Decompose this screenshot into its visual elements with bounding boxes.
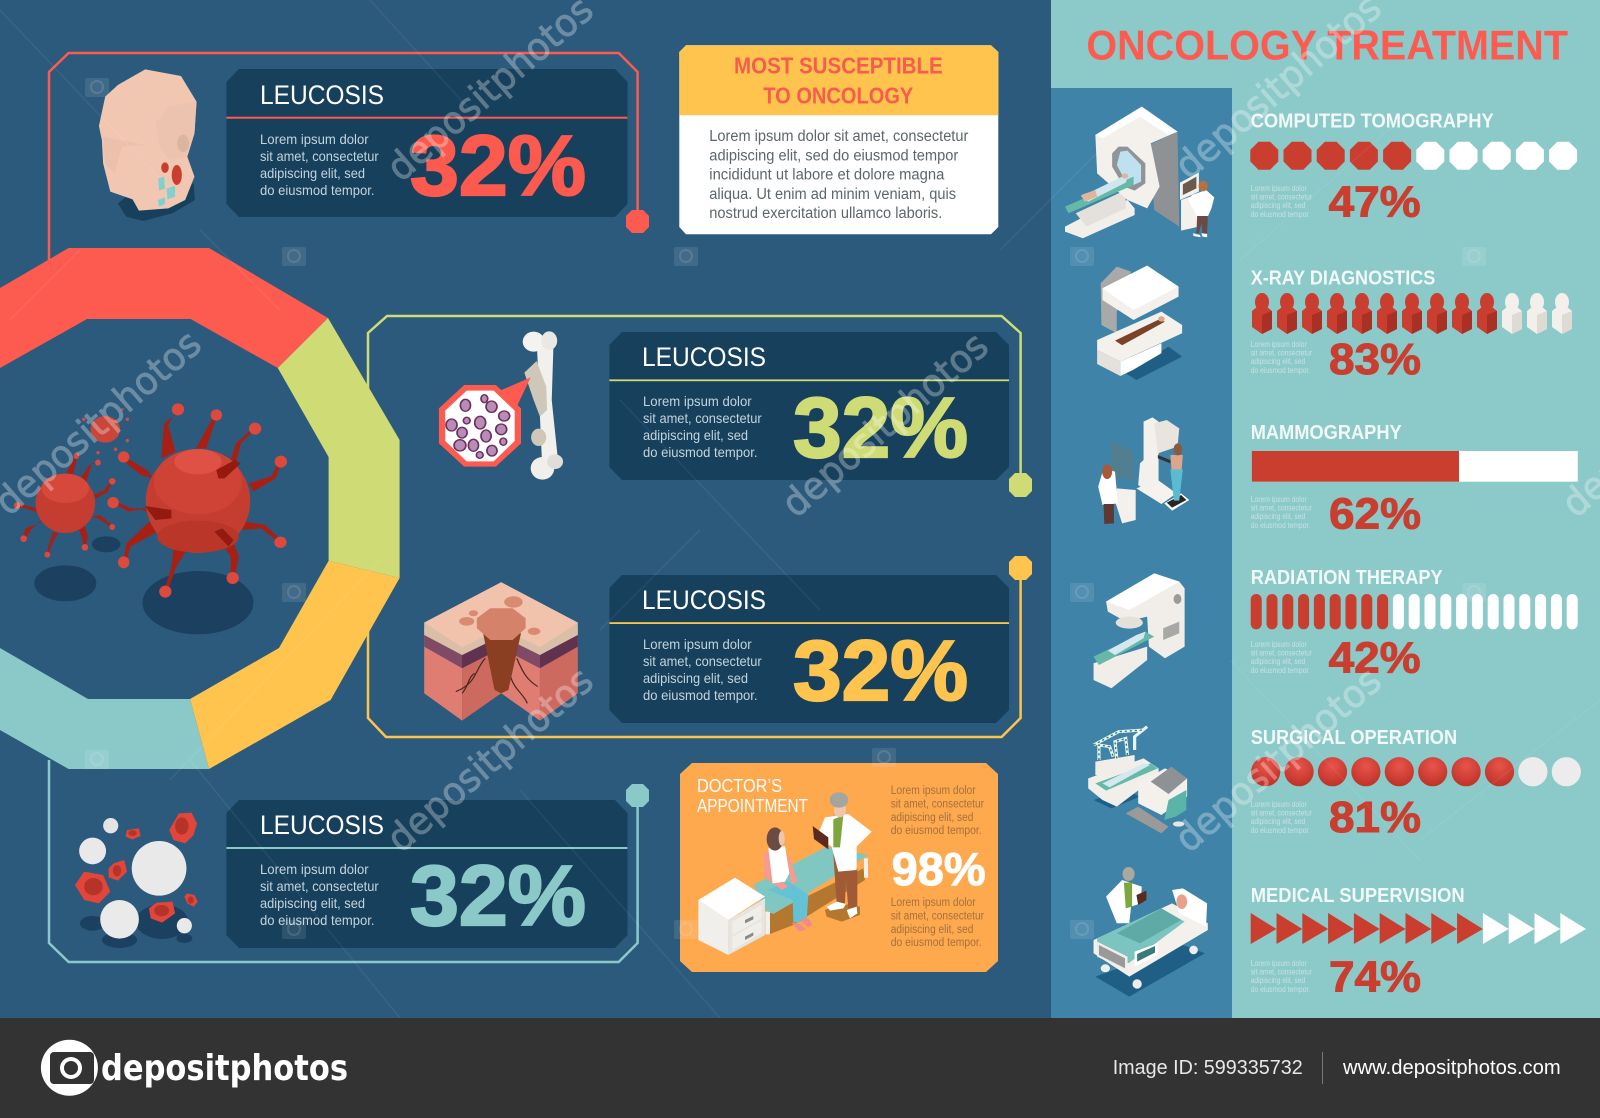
- description: sit amet, consectetur: [643, 410, 762, 426]
- illustration: CT scanner: [1065, 107, 1214, 238]
- percentage: 74%: [1329, 953, 1421, 1002]
- heading: MAMMOGRAPHY: [1251, 422, 1402, 444]
- watermark layer: depositphotos: [773, 323, 997, 526]
- percentage: 47%: [1329, 178, 1421, 227]
- card background: [226, 800, 628, 948]
- description: sit amet, consectetur: [1251, 192, 1312, 202]
- section: X-ray diagnostics: [1251, 267, 1572, 384]
- card heading: DOCTOR’S: [697, 775, 782, 796]
- description: Lorem ipsum dolor: [260, 131, 369, 147]
- card title: TO ONCOLOGY: [763, 82, 913, 108]
- description: Lorem ipsum dolor: [643, 636, 752, 652]
- description: do eiusmod tempor.: [1251, 826, 1310, 835]
- description: do eiusmod tempor.: [260, 912, 374, 928]
- icon: cancer cells: [14, 403, 287, 634]
- description: sit amet, consectetur: [1251, 968, 1312, 976]
- section: mammography: [1251, 422, 1578, 538]
- heading: LEUCOSIS: [642, 585, 766, 615]
- description: adipiscing elit, sed: [260, 165, 365, 181]
- divider: [226, 847, 627, 849]
- pictogram chart: [1252, 293, 1572, 334]
- heading: LEUCOSIS: [642, 342, 766, 372]
- description: do eiusmod tempor.: [1251, 521, 1310, 530]
- description: sit amet, consectetur: [260, 148, 379, 164]
- description: [1251, 184, 1312, 219]
- description bottom: [891, 897, 984, 949]
- description: sit amet, consectetur: [1251, 648, 1312, 658]
- icon: head with lymph nodes: [99, 69, 197, 221]
- description: Lorem ipsum dolor: [1251, 800, 1307, 809]
- illustration column: [1051, 88, 1232, 1018]
- description: Lorem ipsum dolor: [1251, 959, 1307, 968]
- logo wordmark: depositphotos: [101, 1048, 348, 1089]
- card title: [734, 52, 943, 108]
- pictogram chart: [1250, 142, 1577, 170]
- illustration: hospital bed and doctor: [1094, 867, 1208, 997]
- illustration: surgical robot: [1088, 727, 1187, 833]
- percentage: 98%: [892, 843, 986, 895]
- description bottom: do eiusmod tempor.: [891, 937, 982, 949]
- percentage: 62%: [1329, 489, 1421, 538]
- footer logo: [41, 1040, 348, 1096]
- description: [1251, 959, 1312, 994]
- icon: skin cross-section with tumour: [424, 582, 578, 721]
- section: medical supervision: [1251, 885, 1586, 1002]
- heading: LEUCOSIS: [260, 80, 384, 110]
- heading: SURGICAL OPERATION: [1251, 727, 1457, 749]
- description: sit amet, consectetur: [260, 878, 379, 894]
- description: Lorem ipsum dolor: [1251, 495, 1307, 504]
- description top: Lorem ipsum dolor: [891, 785, 976, 797]
- description: [1251, 800, 1312, 835]
- percentage: 81%: [1329, 793, 1421, 842]
- icon: bone with marrow cells: [439, 331, 563, 480]
- description: adipiscing elit, sed: [1251, 357, 1305, 366]
- frame: green: [368, 316, 1032, 497]
- description: adipiscing elit, sed: [1251, 201, 1305, 210]
- card text: aliqua. Ut enim ad minim veniam, quis: [709, 186, 956, 203]
- image ID: Image ID: 599335732: [1113, 1057, 1303, 1079]
- description: adipiscing elit, sed: [643, 670, 748, 686]
- heading: LEUCOSIS: [260, 810, 384, 840]
- card text: incididunt ut labore et dolore magna: [709, 167, 945, 184]
- description top: do eiusmod tempor.: [891, 825, 982, 837]
- description: adipiscing elit, sed: [1251, 657, 1305, 666]
- description: Lorem ipsum dolor: [260, 861, 369, 877]
- divider: [609, 622, 1009, 624]
- description bottom: Lorem ipsum dolor: [891, 897, 976, 909]
- description: Lorem ipsum dolor: [643, 393, 752, 409]
- description: [1251, 340, 1312, 375]
- card background: [609, 332, 1009, 480]
- illustration: radiation therapy machine: [1094, 573, 1185, 688]
- description: [1251, 640, 1312, 675]
- frame: red: [49, 53, 649, 262]
- ring segment: yellow: [190, 561, 400, 769]
- description: do eiusmod tempor.: [1251, 985, 1310, 994]
- description: do eiusmod tempor.: [1251, 366, 1310, 375]
- watermark layer: depositphotos: [378, 658, 602, 861]
- card header: [679, 45, 998, 115]
- description: adipiscing elit, sed: [260, 895, 365, 911]
- description: adipiscing elit, sed: [1251, 512, 1305, 521]
- percentage: 32%: [793, 381, 968, 476]
- card title: MOST SUSCEPTIBLE: [734, 52, 943, 78]
- description: adipiscing elit, sed: [643, 427, 748, 443]
- logo badge: [41, 1040, 98, 1096]
- description bottom: sit amet, consectetur: [891, 910, 984, 922]
- percentage: 32%: [410, 849, 586, 944]
- progress bar: [1252, 451, 1578, 482]
- card: green leucosis: [609, 332, 1009, 480]
- percentage: 42%: [1329, 634, 1421, 683]
- sphere chart: [1251, 757, 1581, 786]
- description: [1251, 495, 1312, 530]
- description: do eiusmod tempor.: [643, 687, 758, 703]
- card text: nostrud exercitation ullamco laboris.: [709, 205, 942, 222]
- card: most susceptible: [679, 45, 998, 234]
- arrow chart: [1251, 913, 1586, 944]
- percentage: 32%: [793, 624, 968, 719]
- percentage: 83%: [1329, 335, 1421, 384]
- description: adipiscing elit, sed: [1251, 976, 1305, 985]
- heading: MEDICAL SUPERVISION: [1251, 885, 1465, 907]
- section: computed tomography: [1250, 111, 1577, 227]
- description: [260, 131, 379, 198]
- description: sit amet, consectetur: [1251, 348, 1312, 358]
- heading: X-RAY DIAGNOSTICS: [1251, 267, 1435, 289]
- description top: sit amet, consectetur: [891, 798, 984, 810]
- card background: [609, 575, 1009, 723]
- card heading: APPOINTMENT: [697, 795, 808, 816]
- heading: RADIATION THERAPY: [1251, 567, 1443, 589]
- heading: COMPUTED TOMOGRAPHY: [1251, 111, 1494, 133]
- description: do eiusmod tempor.: [1251, 666, 1310, 675]
- description: sit amet, consectetur: [1251, 504, 1312, 512]
- divider: [609, 379, 1009, 381]
- description top: [891, 785, 984, 837]
- frame: teal: [49, 760, 649, 962]
- section: radiation therapy: [1251, 567, 1578, 683]
- card background: [680, 763, 998, 972]
- percentage: 32%: [410, 119, 586, 214]
- right teal panel: [1051, 0, 1600, 1018]
- pill chart: [1251, 594, 1578, 629]
- description bottom: adipiscing elit, sed: [891, 924, 973, 936]
- description: Lorem ipsum dolor: [1251, 340, 1307, 349]
- description: do eiusmod tempor.: [260, 182, 374, 198]
- description: Lorem ipsum dolor: [1251, 640, 1307, 649]
- ring segment: red: [0, 248, 328, 368]
- card body: [679, 45, 998, 234]
- card: yellow leucosis: [609, 575, 1009, 723]
- card text: Lorem ipsum dolor sit amet, consectetur: [709, 128, 968, 145]
- illustration: mammography unit: [1098, 417, 1189, 524]
- website: www.depositphotos.com: [1342, 1057, 1561, 1079]
- title: ONCOLOGY TREATMENT: [1086, 21, 1568, 68]
- description top: adipiscing elit, sed: [891, 812, 973, 824]
- ring segment: teal: [0, 648, 209, 769]
- card: red leucosis: [226, 69, 628, 217]
- card heading: [697, 775, 808, 816]
- description: sit amet, consectetur: [643, 653, 762, 669]
- icon: blood cells: [75, 813, 198, 948]
- footer bar: [0, 1018, 1600, 1118]
- divider: [226, 117, 627, 119]
- card: doctor's appointment: [680, 763, 998, 972]
- description: [643, 393, 762, 460]
- illustration: X-ray machine: [1097, 266, 1182, 380]
- section: surgical operation: [1251, 727, 1581, 842]
- card background: [226, 69, 628, 217]
- card text: [709, 128, 968, 222]
- ring chart: [0, 248, 400, 769]
- description: [260, 861, 379, 928]
- illustration: doctor and patient: [698, 792, 872, 955]
- frame: yellow: [368, 556, 1032, 737]
- description: [643, 636, 762, 703]
- description: do eiusmod tempor.: [643, 444, 758, 460]
- ring segment: green: [278, 318, 400, 578]
- description: Lorem ipsum dolor: [1251, 184, 1307, 193]
- card: teal leucosis: [226, 800, 628, 948]
- description: adipiscing elit, sed: [1251, 817, 1305, 826]
- description: do eiusmod tempor.: [1251, 210, 1310, 219]
- watermark layer: depositphotos: [1166, 658, 1390, 861]
- description: sit amet, consectetur: [1251, 808, 1312, 818]
- card text: adipiscing elit, sed do eiusmod tempor: [709, 147, 958, 164]
